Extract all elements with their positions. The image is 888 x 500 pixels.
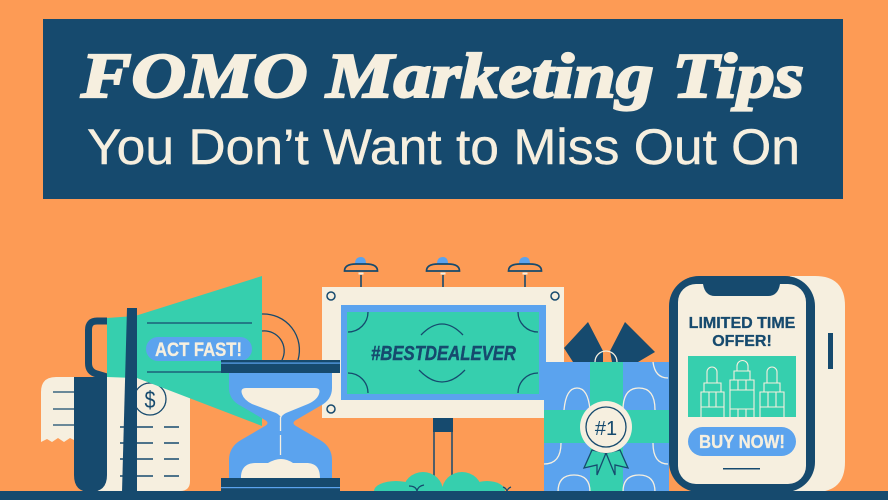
icon: small receipt [41,377,76,442]
bushes [374,472,511,500]
offer heading [689,315,796,350]
label: act fast: ACT FAST! [155,340,242,361]
buy now button: BUY NOW! [699,432,785,452]
icon: large receipt [98,377,190,491]
subheading: You Don’t Want to Miss Out On [87,119,800,175]
billboard post [433,418,453,477]
megaphone [74,276,299,492]
gift box [544,322,669,492]
icon: dollar coin: $ [144,387,156,414]
hourglass [221,360,340,491]
heading: FOMO Marketing Tips [80,41,804,111]
smartphone [669,276,845,492]
award ribbon: #1 [595,418,617,440]
award ribbon [580,401,632,475]
offer heading: LIMITED TIME [689,315,796,332]
billboard text: #BESTDEALEVER [371,343,516,365]
ground line [0,491,888,500]
billboard [322,287,564,418]
buy now button [688,427,796,456]
billboard lamps [344,257,542,287]
title banner [43,19,843,199]
product image with bottles [688,356,796,417]
offer heading: OFFER! [712,333,772,350]
